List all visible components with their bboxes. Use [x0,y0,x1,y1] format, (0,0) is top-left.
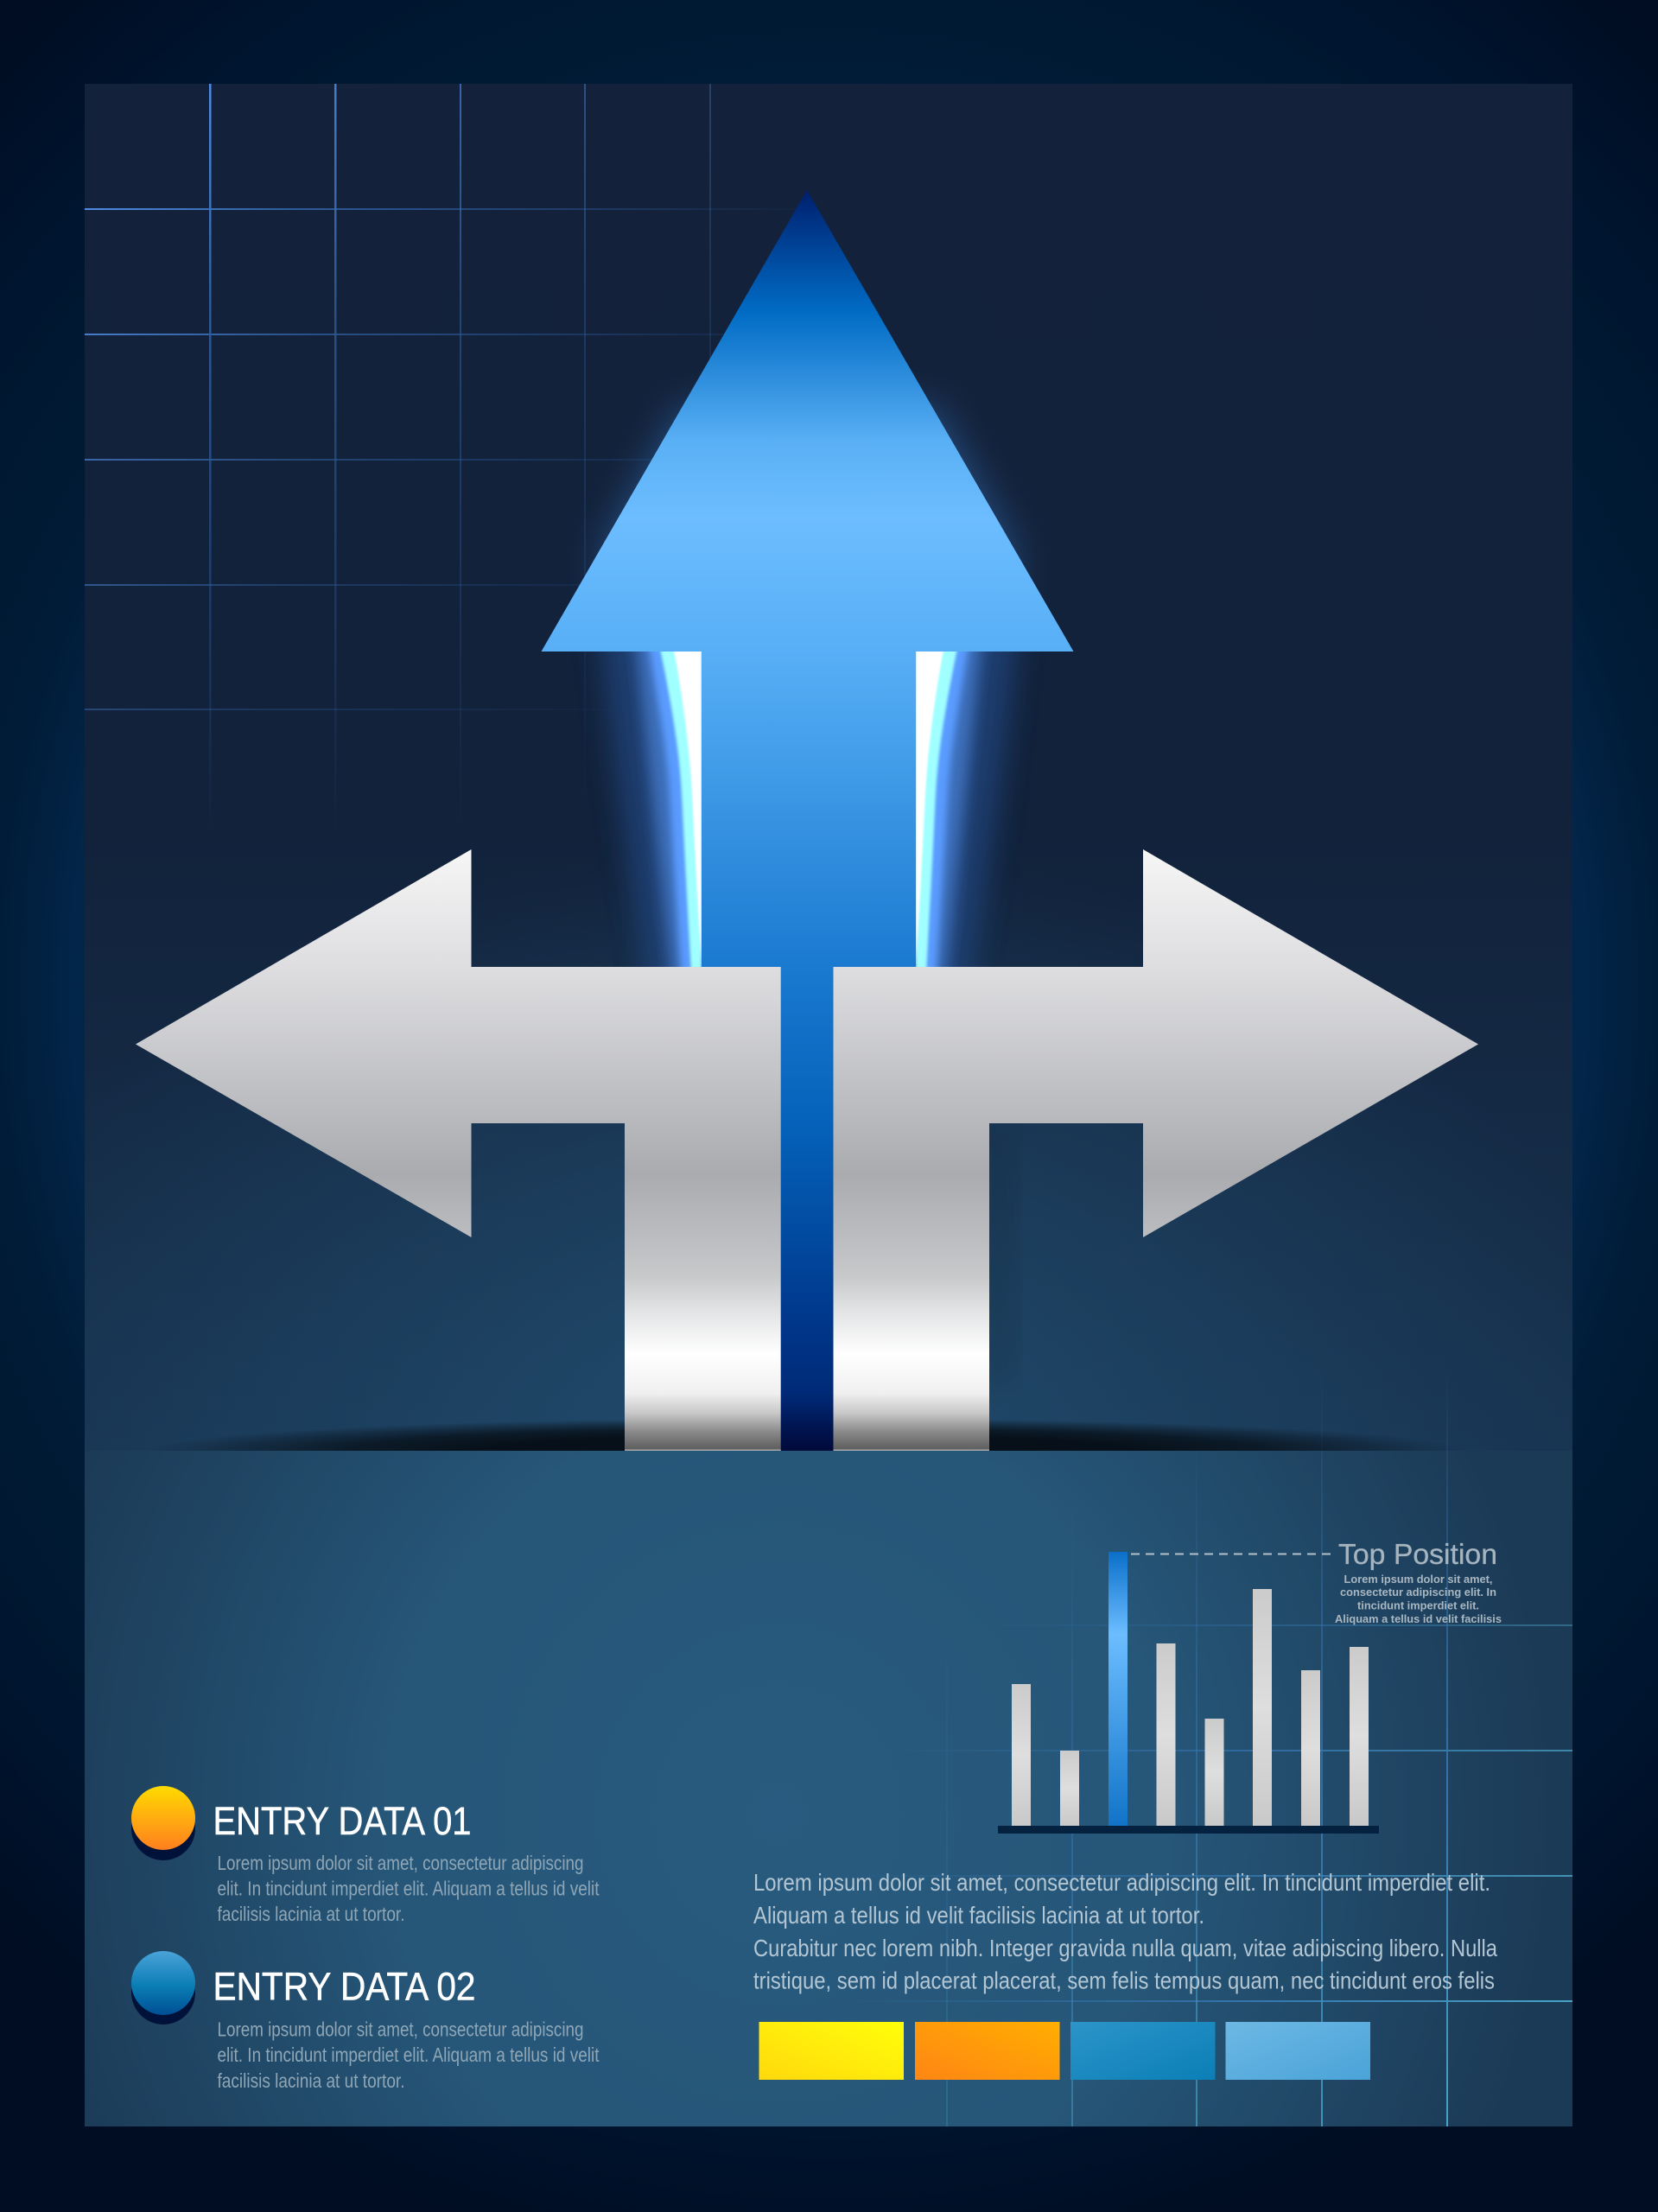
callout: top position: tincidunt imperdiet elit. [1357,1599,1479,1612]
text block: entry 02 description: Lorem ipsum dolor sit amet, consectetur adipiscing [218,2018,584,2041]
heading: entry data 01: ENTRY DATA 01 [213,1799,472,1843]
text block: entry 01 description: Lorem ipsum dolor sit amet, consectetur adipiscing [218,1852,584,1874]
text block: entry 02 description: facilisis lacinia at ut tortor. [218,2069,404,2092]
text block: entry 01 description [218,1852,600,1925]
callout: top position: Lorem ipsum dolor sit amet, [1344,1573,1493,1586]
entry 02 [131,1951,600,2092]
text block: entry 02 description [218,2018,600,2092]
text block: main paragraph: Lorem ipsum dolor sit amet, consectetur adipiscing elit. In tincidunt imperdiet elit. [753,1869,1490,1896]
text block: entry 02 description: elit. In tincidunt imperdiet elit. Aliquam a tellus id velit [218,2044,600,2066]
icon: blue dot [131,1951,195,2024]
stem light glow: right [916,652,1030,967]
arrow foot highlights [625,1450,989,1451]
text block: main paragraph: Aliquam a tellus id velit facilisis lacinia at ut tortor. [753,1902,1204,1929]
callout: top position: Top Position [1338,1539,1497,1571]
left gray arrow [136,849,781,1451]
entry 01 [131,1786,600,1925]
panel: upper dark field [85,84,1572,1451]
callout: top position: Aliquam a tellus id velit facilisis [1335,1612,1502,1625]
panel: lower blue field [85,1451,1572,2126]
stem light glow: left [588,652,702,967]
colour swatches [759,2022,1370,2080]
callout: top position [1335,1539,1502,1625]
text block: main paragraph [753,1869,1497,1994]
bar chart [998,1552,1379,1834]
bars [1012,1552,1369,1826]
heading: entry data 02: ENTRY DATA 02 [213,1965,475,2008]
dashed leader line [1131,1554,1332,1555]
chart baseline [998,1826,1379,1834]
callout: top position: consectetur adipiscing elit. In [1340,1586,1496,1599]
icon: orange dot [131,1786,195,1860]
text block: main paragraph: Curabitur nec lorem nibh. Integer gravida nulla quam, vitae adipiscing libero. Nulla [753,1935,1497,1961]
arrow head glow [605,406,1013,622]
blue up arrow [541,190,1073,1451]
right gray arrow [833,849,1478,1451]
text block: main paragraph: tristique, sem id placerat placerat, sem felis tempus quam, nec tincidunt eros felis [753,1967,1495,1994]
soft shadow of right gray arrow [989,1123,1010,1382]
text block: entry 01 description: elit. In tincidunt imperdiet elit. Aliquam a tellus id velit [218,1877,600,1899]
ground shadow [181,1421,1432,1451]
text block: entry 01 description: facilisis lacinia at ut tortor. [218,1903,404,1925]
